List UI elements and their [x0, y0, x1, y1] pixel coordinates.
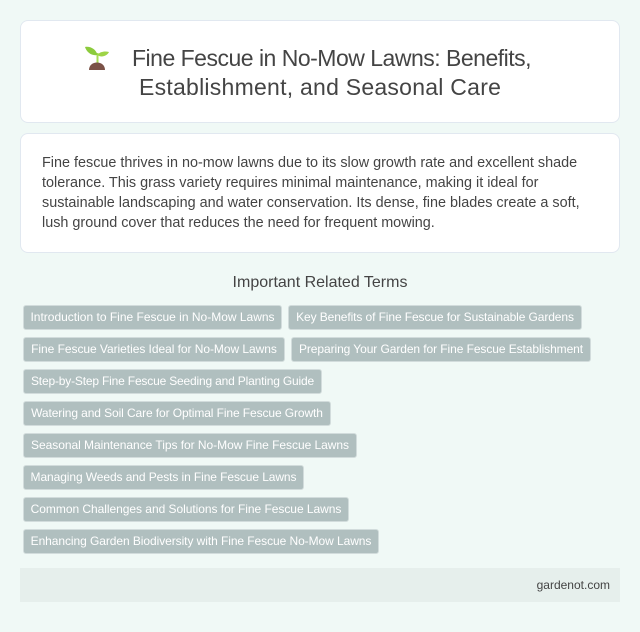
related terms tags: Fine Fescue Varieties Ideal for No-Mow Lawns	[31, 342, 277, 356]
intro text: lush ground cover that reduces the need for frequent mowing.	[42, 215, 435, 231]
related terms tags: Enhancing Garden Biodiversity with Fine Fescue No-Mow Lawns	[31, 534, 371, 548]
footer bar	[20, 568, 620, 602]
related terms tags: Watering and Soil Care for Optimal Fine Fescue Growth	[31, 406, 323, 420]
title: Fine Fescue in No-Mow Lawns: Benefits,	[132, 45, 531, 71]
intro text: tolerance. This grass variety requires minimal maintenance, making it ideal for	[42, 175, 538, 191]
intro text: Fine fescue thrives in no-mow lawns due to its slow growth rate and excellent shade	[42, 155, 577, 171]
related terms tags: Key Benefits of Fine Fescue for Sustainable Gardens	[296, 310, 574, 324]
related terms tags: Step-by-Step Fine Fescue Seeding and Planting Guide	[31, 374, 314, 388]
title card	[20, 20, 620, 123]
related terms tags: Introduction to Fine Fescue in No-Mow Lawns	[30, 310, 275, 324]
icon: seedling	[85, 46, 109, 70]
intro text	[42, 155, 580, 231]
section heading: Important Related Terms	[233, 274, 407, 291]
related terms tags: Common Challenges and Solutions for Fine Fescue Lawns	[31, 502, 341, 516]
related terms tags: Preparing Your Garden for Fine Fescue Establishment	[299, 342, 583, 356]
intro panel	[20, 133, 620, 253]
title card: Establishment, and Seasonal Care	[139, 74, 501, 100]
footer source: gardenot.com	[537, 578, 610, 592]
related terms tags: Managing Weeds and Pests in Fine Fescue Lawns	[31, 470, 296, 484]
related terms tags	[23, 305, 591, 554]
related terms tags: Seasonal Maintenance Tips for No-Mow Fine Fescue Lawns	[31, 438, 349, 452]
intro text: sustainable landscaping and water conservation. Its dense, fine blades create a soft,	[42, 195, 580, 211]
